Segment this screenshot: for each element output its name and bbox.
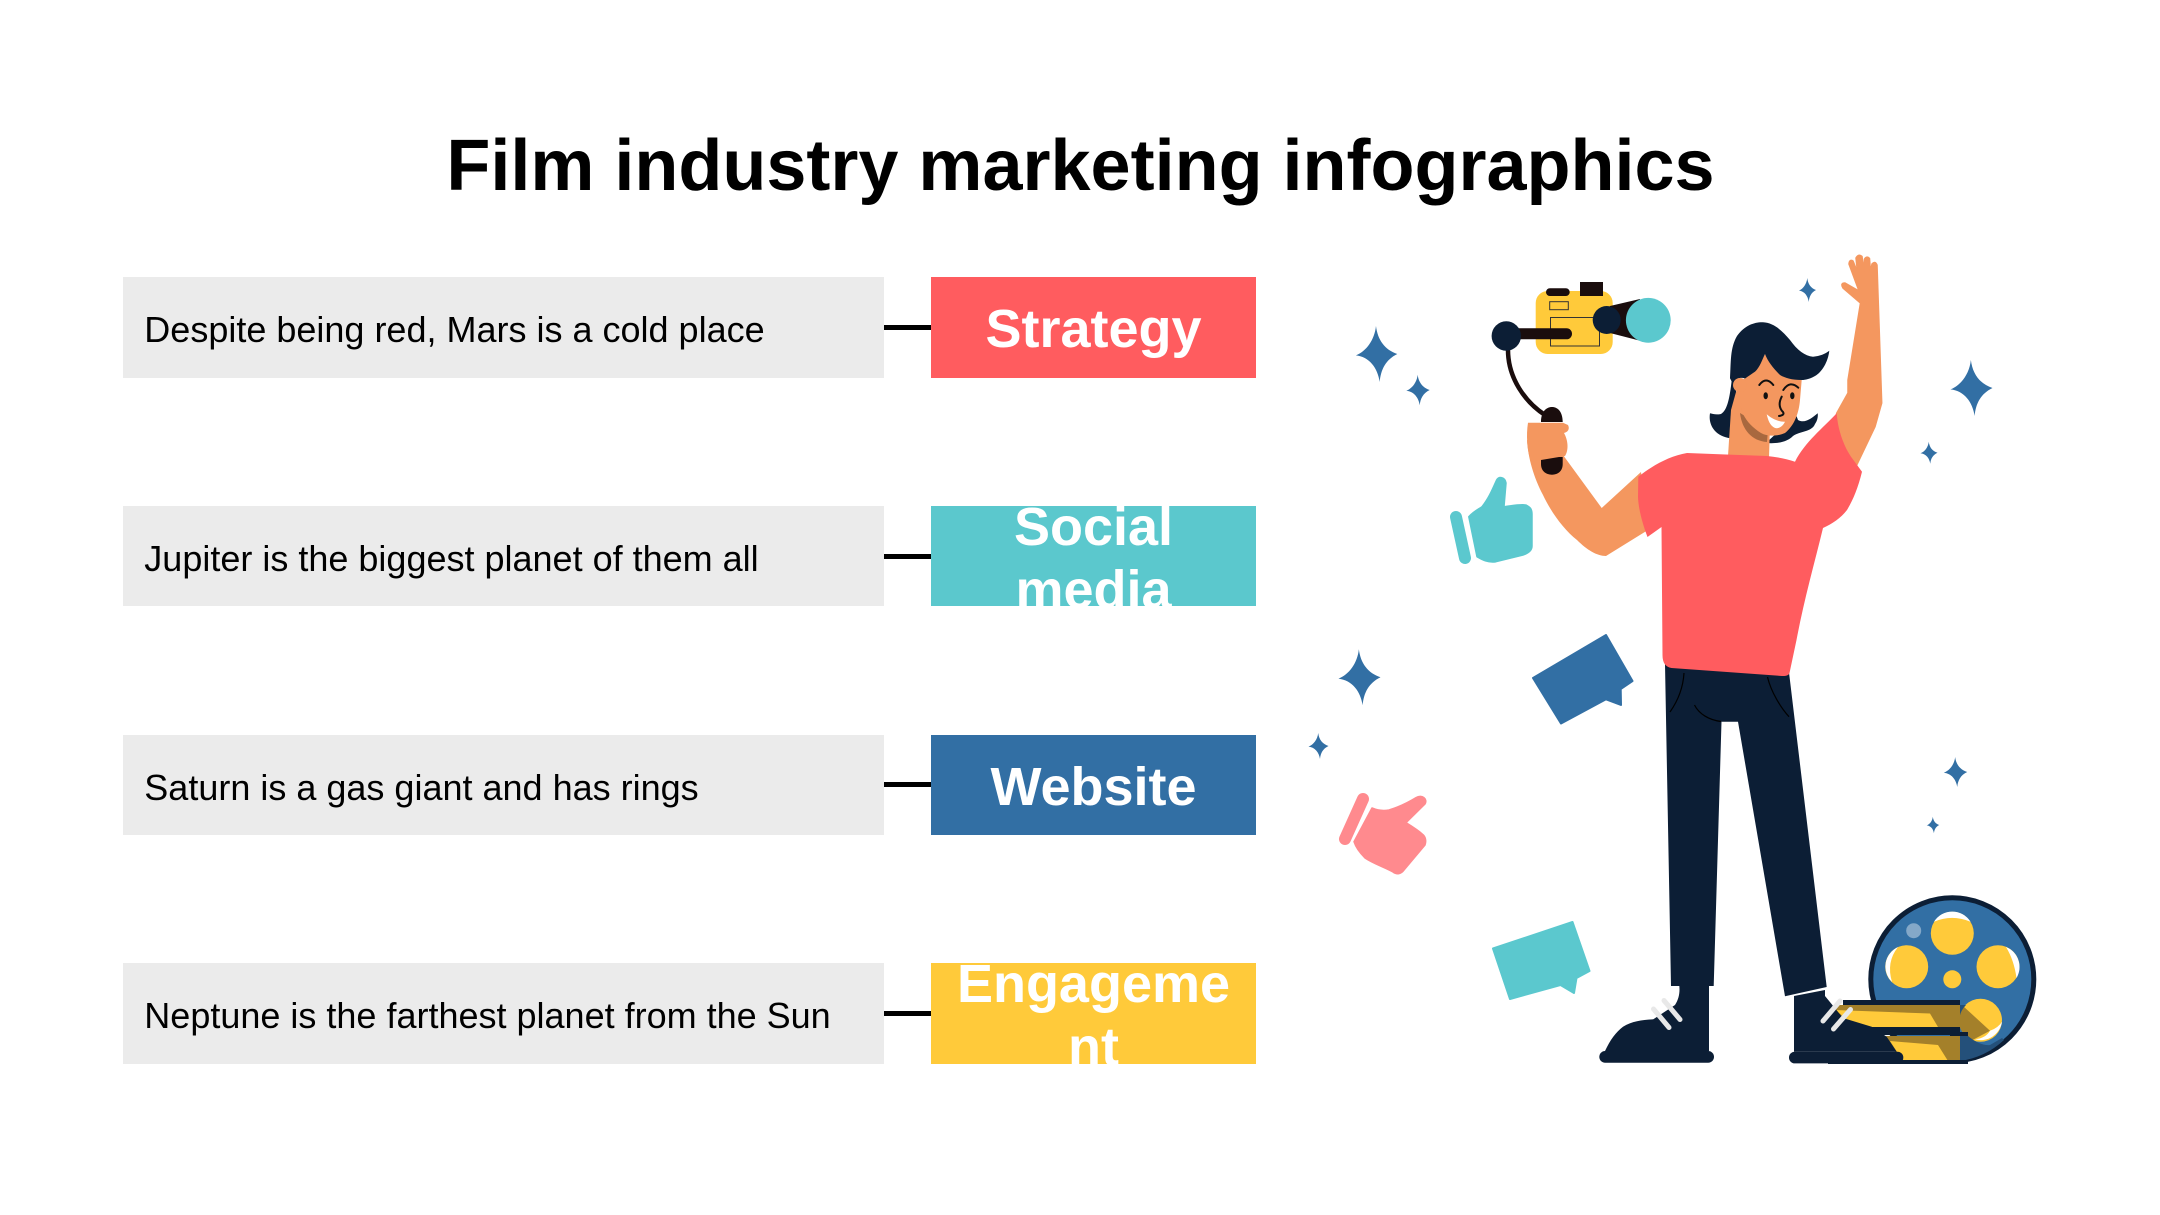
label: website: Website [990, 757, 1197, 817]
description: strategy: Despite being red, Mars is a cold place [144, 309, 765, 350]
connector: website [884, 782, 931, 787]
figure: face [1736, 354, 1802, 436]
description: engagement [123, 963, 884, 1064]
row: social media [123, 506, 1256, 606]
figure: hand gripping camera handle [1527, 423, 1569, 462]
figure: t-shirt [1638, 413, 1862, 676]
label: website [931, 735, 1256, 835]
row: engagement [123, 963, 1256, 1064]
description: engagement: Neptune is the farthest planet from the Sun [144, 995, 831, 1036]
icon: thumbs down [1345, 796, 1426, 874]
icon: thumbs up [1456, 478, 1532, 562]
row: strategy [123, 277, 1256, 378]
figure: smile [1767, 414, 1785, 428]
stack of books [1828, 1000, 1968, 1064]
icon: teal speech bubble [1493, 922, 1590, 999]
figure: ear [1733, 378, 1747, 392]
description: website: Saturn is a gas giant and has rings [144, 767, 699, 808]
row: website [123, 735, 1256, 835]
figure: left arm [1527, 440, 1648, 556]
figure: neck [1728, 392, 1770, 458]
figure: front hair [1730, 322, 1829, 384]
description: website [123, 735, 884, 835]
description: social media [123, 506, 884, 606]
figure: raised arm [1830, 255, 1882, 465]
label: engagement [931, 963, 1256, 1064]
figure: eyes, brows and nose [1759, 380, 1798, 416]
figure: neck shadow [1740, 413, 1768, 442]
figure: left shoe [1599, 986, 1714, 1063]
icon: blue speech bubble [1533, 635, 1632, 724]
connector: social media [884, 554, 931, 559]
camera on gimbal [1492, 282, 1671, 475]
label: strategy: Strategy [985, 299, 1202, 359]
label: social media [931, 506, 1256, 606]
label: strategy [931, 277, 1256, 378]
figure: right shoe [1789, 990, 1903, 1063]
description: strategy [123, 277, 884, 378]
description: social media: Jupiter is the biggest planet of them all [144, 538, 759, 579]
sparkle stars [1308, 278, 1992, 833]
connector: engagement [884, 1011, 931, 1016]
film reel [1871, 898, 2034, 1061]
connector: strategy [884, 325, 931, 330]
title: Film industry marketing infographics [446, 126, 1715, 206]
figure: back hair [1710, 378, 1818, 443]
figure: trousers [1665, 664, 1827, 996]
